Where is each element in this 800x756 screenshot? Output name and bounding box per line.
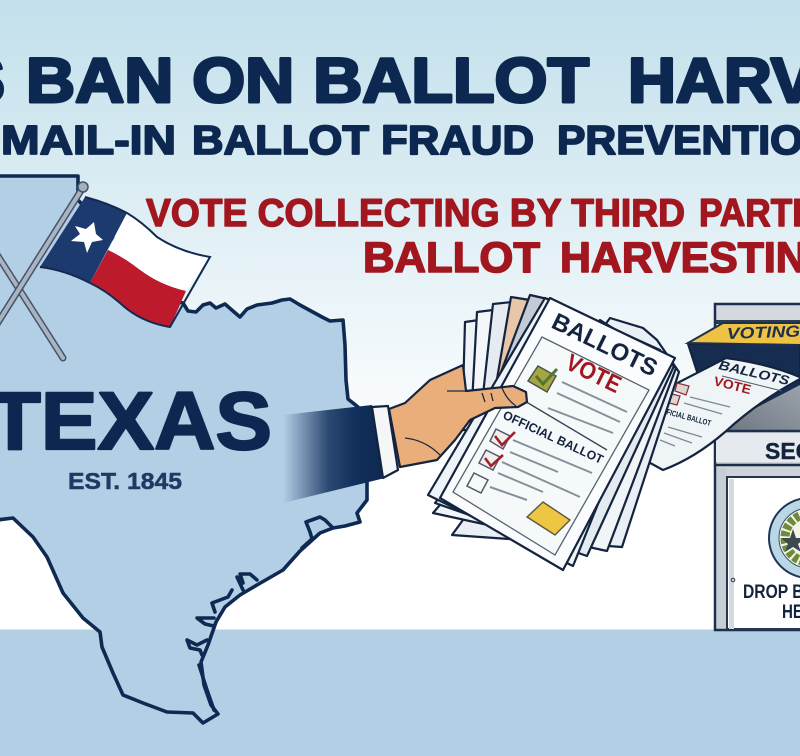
box body [715,431,800,630]
label: drop ballots here [743,582,800,623]
title: ban on ballot harvesting: BAN ON BALLOT [26,46,589,116]
arm: shirt cuff [372,406,398,478]
box front panel [727,477,800,629]
ballot entering the slot [632,357,800,470]
subtitle: mail-in ballot fraud prevention [1,117,800,163]
label: vote: VOTE [561,349,625,399]
icon: crossed flag poles [0,182,88,358]
back sheets [452,318,679,547]
red heading: ballot harvesting [363,234,800,282]
subtitle: mail-in ballot fraud prevention: BALLOT FRAUD [192,117,534,163]
ballot text lines [490,382,627,500]
label: slot official ballot: OFFICIAL BALLOT [657,405,712,428]
arm: sleeve [283,405,385,503]
label: official ballot: OFFICIAL BALLOT [501,408,606,467]
red heading: vote collecting by third parties: VOTE COLLECTING BY THIRD [146,192,685,235]
red heading: ballot harvesting: BALLOT [363,234,540,282]
front sheet [440,298,675,570]
map label: established date: EST. 1845 [68,468,182,494]
icon: green checkbox [528,366,557,392]
icon: ballot drop box [688,304,800,630]
icon: red checkboxes [467,429,515,493]
background gradient [0,0,800,480]
coast islands and bays [187,517,333,710]
icon: state seal [769,498,800,578]
box lid [688,323,800,345]
subtitle: mail-in ballot fraud prevention: MAIL-IN [1,117,176,163]
ballot stack [428,295,679,570]
icon: Texas flag [40,197,210,327]
icon: hand holding ballots [389,365,527,467]
map: state of Texas [0,176,367,723]
title: ban on ballot harvesting [0,46,800,116]
label: slot ballot title: BALLOTS [717,357,791,388]
bottom band [0,630,800,756]
front ballot content [453,308,662,555]
yellow stamp [527,502,570,535]
icon: box slot [688,344,800,425]
label: ballots: BALLOTS [547,308,662,382]
label: slot ballot vote: VOTE [712,373,753,397]
